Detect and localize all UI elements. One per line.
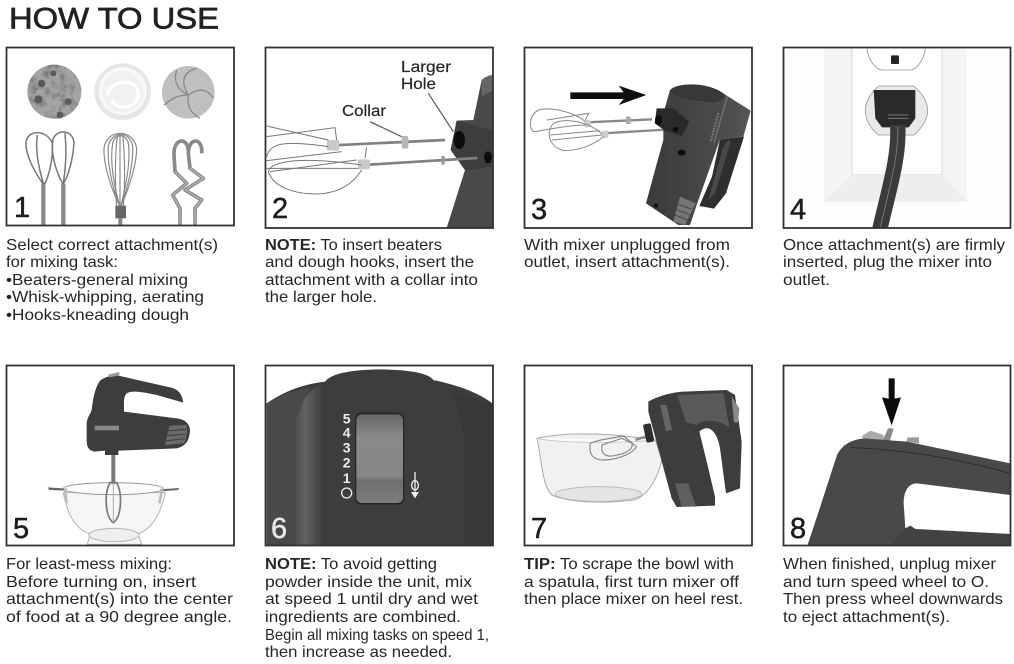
step 2 illustration: mixer with beaters: [267, 59, 493, 230]
icon: dough hooks: [173, 141, 203, 225]
mixer body: [446, 75, 493, 230]
shaft and whisk: [106, 455, 120, 523]
frame: [784, 366, 1010, 546]
hole: smaller: [484, 151, 492, 163]
frame: [266, 48, 493, 228]
text: eject attachments: Then press wheel downwards: [783, 591, 1003, 608]
frame: [6, 48, 234, 226]
text: eject attachments: and turn speed wheel to O.: [783, 574, 989, 591]
text: least-mess mixing: Before turning on, insert: [6, 574, 197, 591]
arrow pointing down: [882, 378, 901, 425]
step 5 illustration: [13, 372, 190, 545]
beaters: [590, 435, 650, 460]
plug: [874, 90, 915, 127]
mixer handle: [699, 137, 744, 209]
text: tip on scraping: [524, 556, 743, 608]
mixer: [807, 438, 1010, 547]
text: tip on scraping: a spatula, first turn mixer off: [524, 574, 740, 591]
step 4 illustration: [790, 48, 967, 228]
panel 8: eject: [783, 366, 1010, 626]
step 7 illustration: [531, 390, 742, 545]
bowl: [48, 483, 179, 544]
text: eject attachments: to eject attachment(s).: [783, 609, 950, 626]
text: note on speeds: NOTE: To avoid getting: [265, 556, 437, 573]
icon: bread roll: [162, 66, 215, 119]
leader lines: [370, 93, 453, 137]
text: note on inserting: and dough hooks, insert the: [265, 254, 474, 271]
text: eject attachments: [783, 556, 1003, 626]
text: plug in: inserted, plug the mixer into: [783, 254, 992, 271]
frame: [266, 366, 493, 546]
step 6 illustration: [267, 369, 493, 547]
text: note on inserting: [265, 237, 478, 306]
speed numbers: 5: [343, 410, 351, 426]
text: note on speeds: then increase as needed.: [265, 644, 452, 661]
speed numbers: 3: [343, 440, 351, 456]
frame: [524, 48, 752, 228]
mixer top: [267, 369, 493, 547]
text: select attachment: [6, 237, 218, 324]
mixer body: [646, 84, 751, 225]
step 1 illustration: foods and attachments: [14, 63, 215, 225]
eject symbol: [411, 472, 419, 498]
text: note on speeds: [265, 556, 489, 661]
text: note on inserting: NOTE: To insert beaters: [265, 237, 442, 254]
label: larger hole: [402, 60, 451, 90]
text: plug in: Once attachment(s) are firmly: [783, 237, 1005, 254]
step number 8: 8: [790, 513, 806, 545]
step number 4: 4: [790, 194, 806, 226]
vent: [673, 197, 696, 225]
text: eject attachments: When finished, unplug mixer: [783, 556, 997, 573]
lower outlet: [865, 86, 928, 135]
text: plug in: outlet.: [783, 272, 830, 289]
text: insert while unplugged: With mixer unplugged from: [524, 237, 730, 254]
mount block: [655, 108, 689, 136]
text: note on speeds: powder inside the unit, mix: [265, 574, 472, 591]
text: insert while unplugged: outlet, insert attachment(s).: [524, 254, 730, 271]
label: larger hole: Hole: [401, 76, 436, 93]
arrow pointing right: [570, 86, 646, 105]
step number 6: 6: [271, 513, 287, 545]
step number 1: 1: [14, 192, 30, 224]
panel 5: least-mess mixing: [6, 366, 234, 626]
frame: [784, 48, 1010, 228]
step number 5: 5: [13, 513, 29, 545]
text: plug in: [783, 237, 1005, 289]
step number 7: 7: [531, 513, 547, 545]
mixer: [87, 376, 190, 455]
text: note on speeds: at speed 1 until dry and wet: [265, 591, 479, 608]
label: larger hole: Larger: [401, 59, 452, 76]
text: note on speeds: ingredients are combined.: [265, 609, 461, 626]
speed numbers: [343, 410, 351, 486]
hole: larger: [454, 131, 465, 149]
icon: whisk: [104, 133, 137, 225]
panel 3: insert attachments: [524, 48, 752, 271]
text: least-mess mixing: attachment(s) into the center: [6, 591, 234, 608]
frame: [6, 366, 234, 546]
speed wheel and ejector: [862, 431, 884, 440]
step 3 illustration: [530, 84, 751, 226]
text: tip on scraping: TIP: To scrape the bowl with: [524, 556, 734, 573]
text: select attachment: for mixing task:: [6, 254, 118, 271]
speed numbers: 4: [343, 424, 351, 440]
wall plate: [824, 47, 967, 202]
text: least-mess mixing: For least-mess mixing:: [6, 556, 172, 573]
text: select attachment: Select correct attachment(s): [6, 237, 218, 254]
label: collar: Collar: [342, 103, 387, 120]
beaters: [530, 109, 670, 151]
icon: beaters: [26, 132, 74, 225]
text: insert while unplugged: [524, 237, 730, 271]
text: select attachment: •Beaters-general mixing: [6, 272, 188, 289]
beater without collar: [267, 147, 477, 194]
glass bowl: [537, 434, 662, 502]
speed slider: [355, 412, 404, 505]
speed numbers: 2: [343, 455, 351, 471]
panel 2: insert collar attachment: [265, 48, 493, 306]
off marker: [342, 488, 352, 498]
cord: [880, 125, 898, 230]
text: least-mess mixing: [6, 556, 234, 626]
panel 4: plug in: [782, 47, 1012, 289]
beater with collar: [267, 126, 445, 161]
text: tip on scraping: then place mixer on heel rest.: [524, 591, 743, 608]
text: note on inserting: the larger hole.: [265, 289, 377, 306]
step number 2: 2: [272, 193, 288, 225]
text: least-mess mixing: of food at a 90 degree angle.: [6, 609, 232, 626]
mixer: [648, 390, 742, 507]
upper outlet: [867, 47, 925, 70]
icon: cream in a bowl: [94, 63, 151, 120]
text: select attachment: •Whisk-whipping, aerating: [6, 289, 204, 306]
panel 7: heel rest: [524, 366, 752, 608]
speed numbers: 1: [343, 470, 351, 486]
panel 1: choose attachment: [6, 48, 234, 324]
panel 6: speed wheel: [265, 366, 493, 661]
step 8 illustration: [790, 378, 1010, 547]
text: note on speeds: Begin all mixing tasks on speed 1,: [265, 627, 489, 644]
frame: [524, 366, 752, 546]
text: select attachment: •Hooks-kneading dough: [6, 307, 189, 324]
step number 3: 3: [531, 194, 547, 226]
text: note on inserting: attachment with a collar into: [265, 272, 478, 289]
title: HOW TO USE: [9, 2, 219, 36]
icon: cookie: [27, 65, 81, 119]
